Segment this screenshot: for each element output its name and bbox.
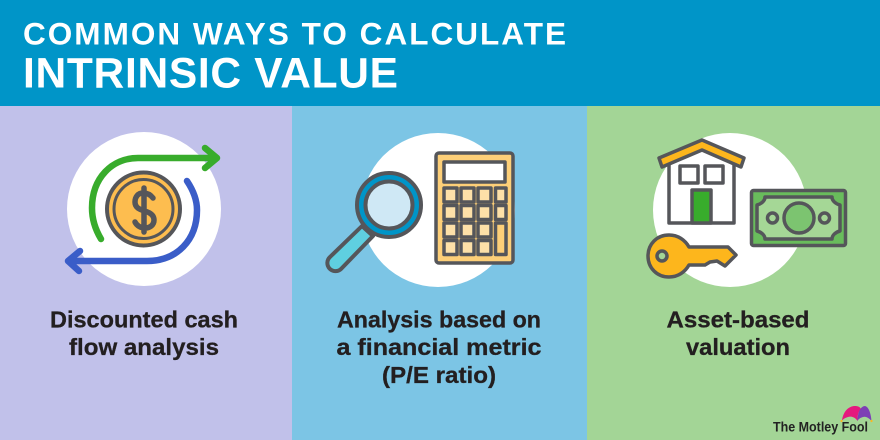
logo: The Motley Fool xyxy=(773,406,873,434)
icon: house xyxy=(659,140,744,223)
icon: key xyxy=(648,235,736,277)
panel: financial metric xyxy=(292,106,587,440)
title xyxy=(23,16,566,98)
icon: calculator xyxy=(436,153,513,263)
icon: magnifying glass xyxy=(327,173,421,271)
panel: financial metric: (P/E ratio) xyxy=(382,362,496,388)
icon: coin with arrows xyxy=(68,148,217,271)
panel: asset-based: valuation xyxy=(686,334,790,360)
label: Discounted cash xyxy=(50,306,238,332)
header band xyxy=(0,0,880,106)
title: INTRINSIC VALUE xyxy=(23,50,398,98)
panel: financial metric: a financial metric xyxy=(336,334,542,360)
icon: banknote xyxy=(752,190,846,246)
title: COMMON WAYS TO CALCULATE xyxy=(23,16,566,52)
label: Analysis based on xyxy=(337,306,541,332)
panel: asset-based xyxy=(587,106,880,440)
label: Asset-based xyxy=(666,306,810,332)
panel: discounted cash flow xyxy=(0,106,292,440)
logo: The Motley Fool: The Motley Fool xyxy=(773,420,868,434)
panel: discounted cash flow: flow analysis xyxy=(69,334,219,360)
